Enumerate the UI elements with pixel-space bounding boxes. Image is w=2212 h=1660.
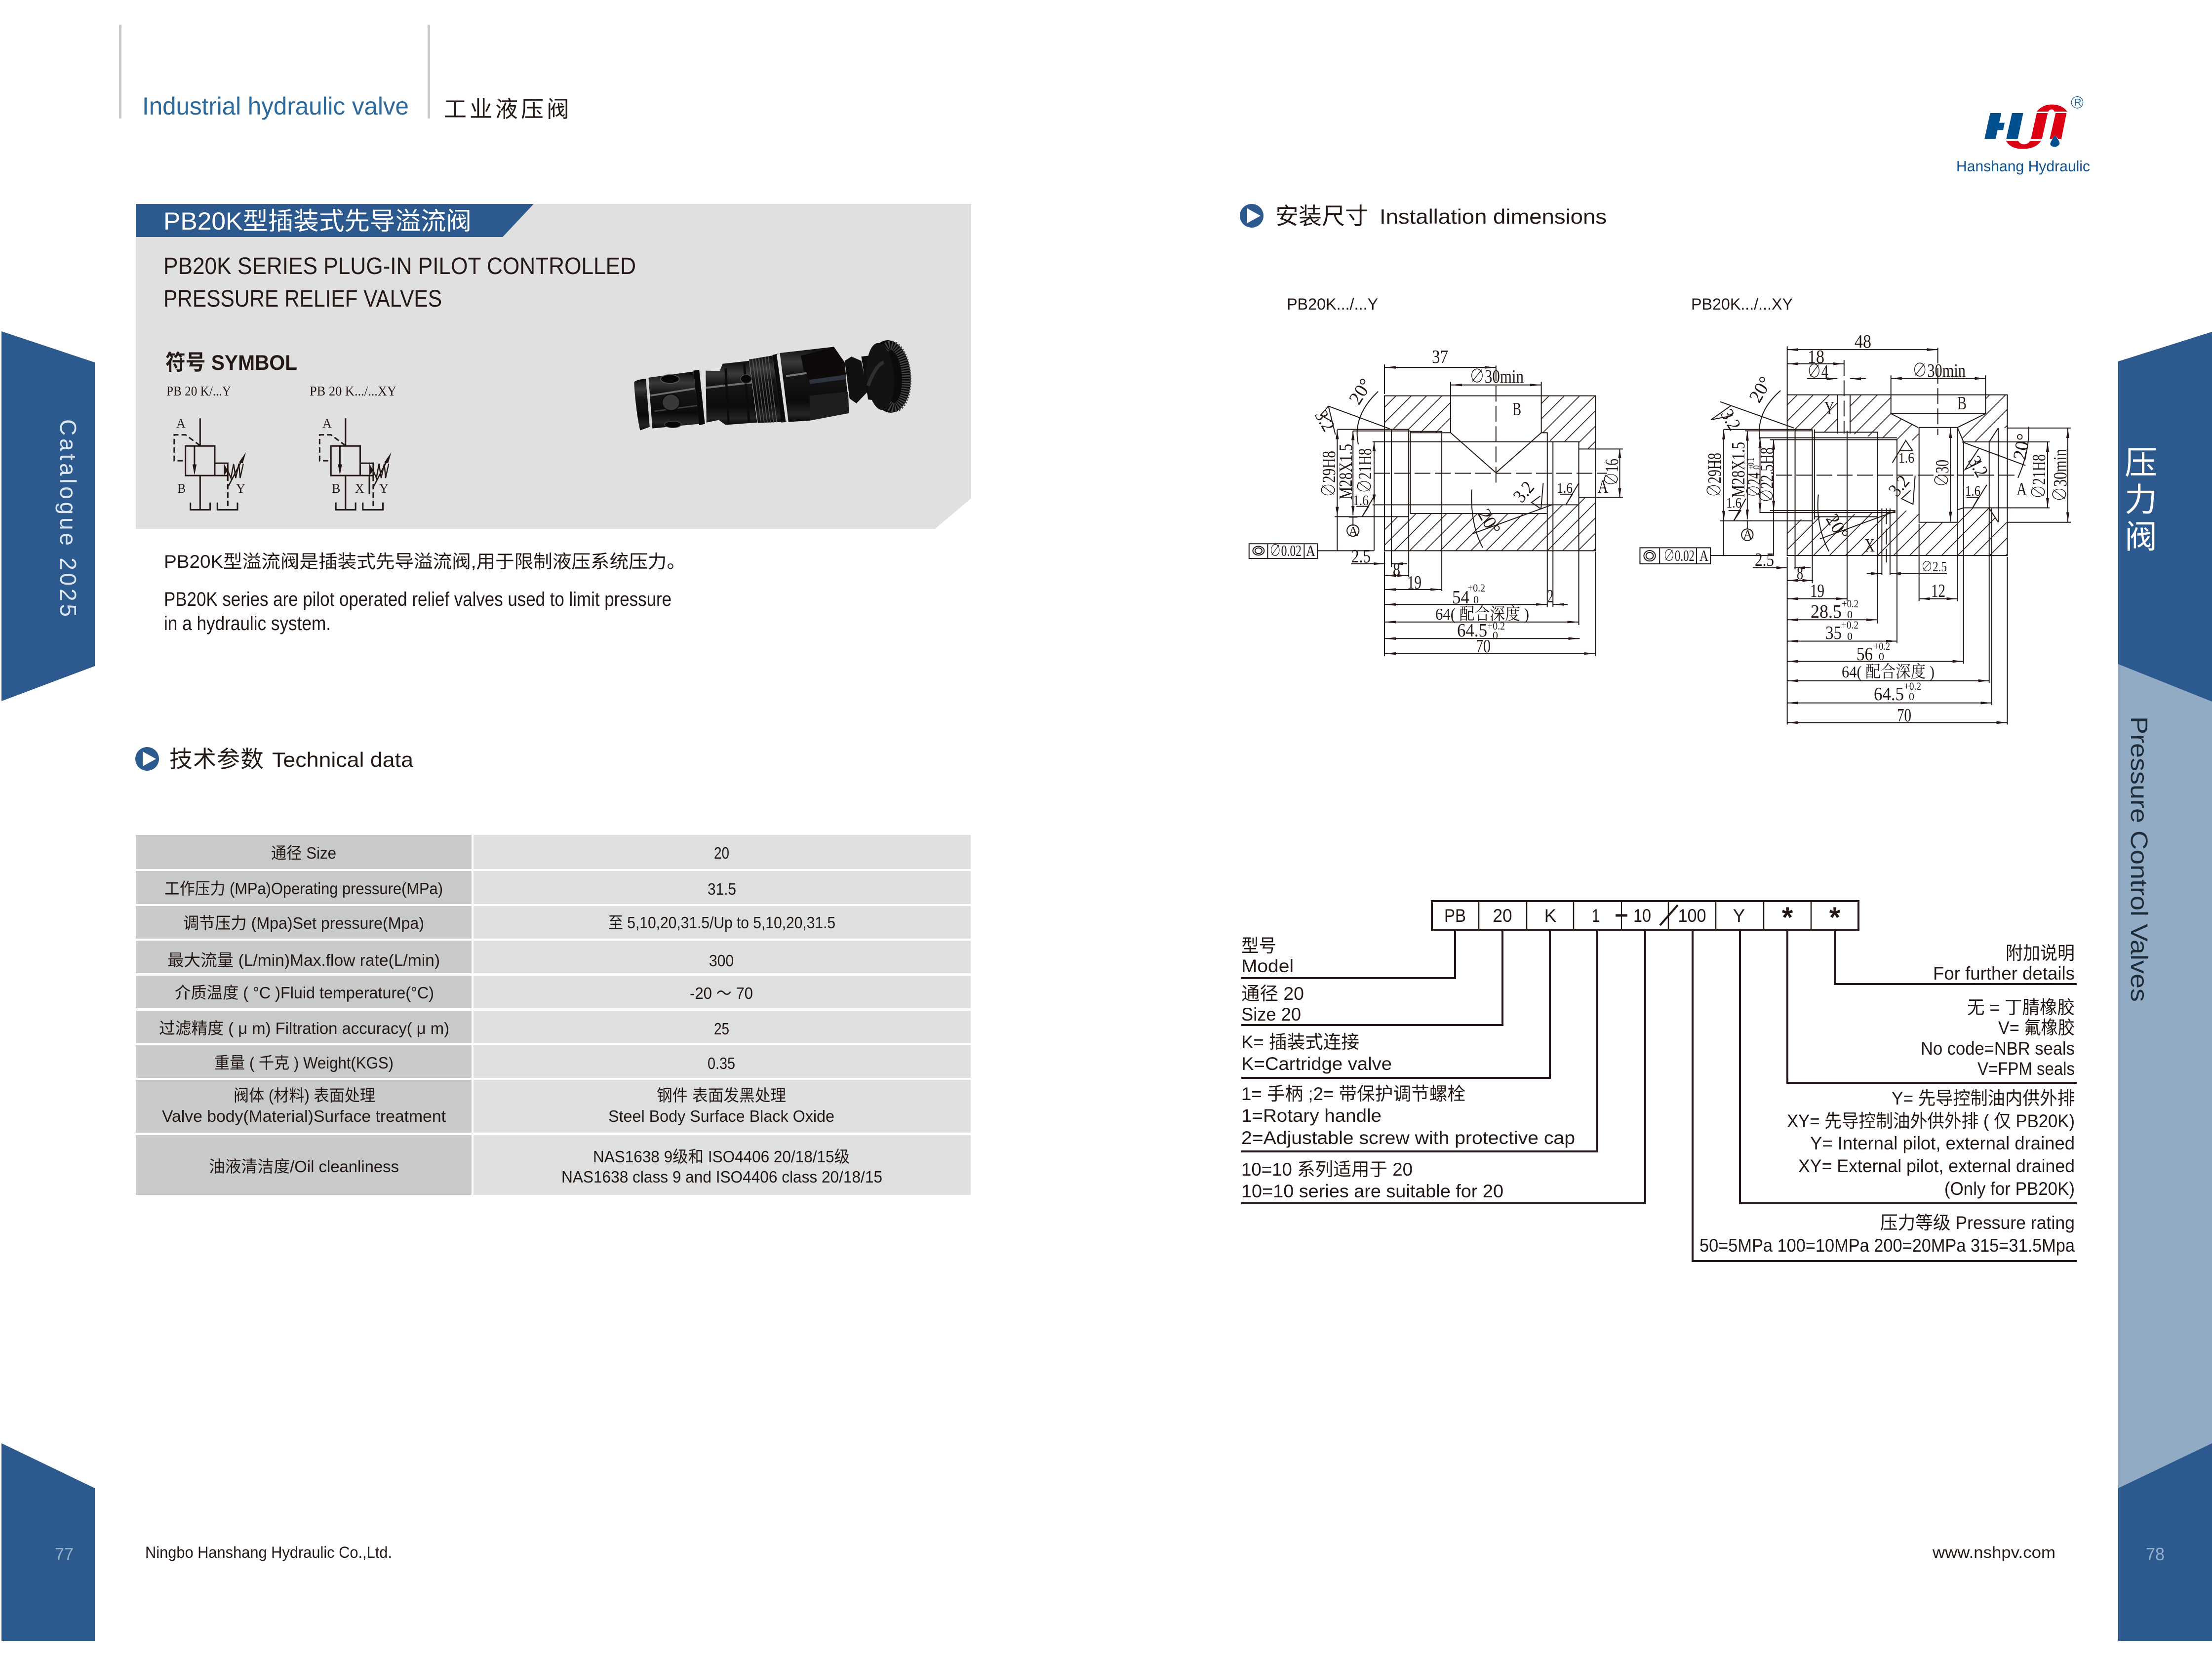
hydraulic symbols: A — [322, 416, 332, 431]
table labels: 调节压力 (Mpa)Set pressure(Mpa) — [183, 914, 424, 932]
drawing Y dimension labels: B — [1512, 399, 1521, 420]
symbol captions — [166, 384, 396, 398]
table labels: 通径 Size — [271, 844, 336, 862]
code boxes: * — [1829, 902, 1841, 934]
code boxes — [1432, 901, 1858, 934]
right legend text: Y= 先导控制油内供外排 — [1892, 1088, 2075, 1108]
drawing XY dimension labels: 20° — [2010, 432, 2034, 462]
drawing XY dimension labels — [1663, 331, 2071, 726]
right legend text: For further details — [1933, 963, 2075, 984]
heading: installation dimensions — [1240, 203, 1607, 229]
drawing XY dimension labels: 20° — [1745, 373, 1776, 406]
right legend text — [1699, 943, 2075, 1256]
code boxes: 10 — [1633, 906, 1651, 926]
drawing XY dimension labels: ∅21H8 — [2029, 454, 2050, 499]
drawing XY dimension labels: A — [1699, 547, 1708, 564]
drawing XY dimension labels: X — [1864, 535, 1875, 556]
drawing Y dimension labels: 19 — [1407, 572, 1422, 593]
drawing Y dimension labels: 64( 配合深度 ) — [1435, 605, 1529, 624]
drawing XY dimension labels: 35 — [1825, 623, 1842, 643]
leader lines — [1241, 930, 2077, 1261]
heading: technical data — [135, 746, 414, 772]
heading: installation dimensions: 安装尺寸 — [1275, 203, 1368, 229]
left tab: catalogue — [1, 331, 95, 701]
heading: technical data: Technical data — [272, 748, 414, 771]
drawing XY dimension labels: +0.2 — [1841, 619, 1858, 631]
code boxes: 100 — [1678, 906, 1706, 926]
hydraulic symbols: X — [355, 481, 364, 496]
right legend text: Y= Internal pilot, external drained — [1810, 1133, 2075, 1153]
drawing XY dimension labels: 3.2 — [1885, 472, 1914, 501]
intro text: in a hydraulic system. — [164, 613, 331, 634]
right legend text: 无 = 丁腈橡胶 — [1967, 997, 2075, 1018]
drawing Y dimension labels: A — [1598, 476, 1608, 497]
table values: Steel Body Surface Black Oxide — [608, 1107, 834, 1125]
drawing XY dimension labels: 1.6 — [1726, 495, 1741, 511]
left legend text — [1241, 936, 1575, 1201]
right legend text: V= 氟橡胶 — [1998, 1018, 2075, 1038]
left legend text: Size 20 — [1241, 1004, 1301, 1025]
page number 78: 78 — [2146, 1544, 2165, 1564]
hydraulic symbols: Y — [379, 481, 389, 496]
drawing Y dimension labels: 1.6 — [1557, 480, 1573, 496]
english title: PB20K SERIES PLUG-IN PILOT CONTROLLED — [163, 253, 636, 279]
code boxes: Y — [1733, 906, 1745, 926]
intro text — [164, 552, 686, 634]
drawing XY dimension labels: 0 — [1847, 630, 1853, 642]
table labels: 重量 ( 千克 ) Weight(KGS) — [214, 1054, 394, 1072]
hydraulic symbols: A — [176, 416, 186, 431]
left legend text: 10=10 系列适用于 20 — [1241, 1159, 1413, 1180]
table labels — [159, 844, 449, 1176]
left legend text: 1= 手柄 ;2= 带保护调节螺栓 — [1241, 1084, 1465, 1104]
table labels: 介质温度 ( °C )Fluid temperature(°C) — [175, 984, 434, 1002]
valve photo — [634, 339, 913, 431]
logo: Hanshang Hydraulic: Hanshang Hydraulic — [1956, 158, 2090, 175]
drawing XY dimension labels: 3.2 — [1716, 406, 1745, 434]
drawing XY dimension labels: B — [1957, 393, 1967, 414]
drawing XY dimension labels: Y — [1824, 398, 1834, 419]
page header: 工业液压阀 — [444, 96, 569, 122]
drawing XY dimension labels: 1.6 — [1965, 483, 1980, 499]
table values: -20 ～ 70 — [690, 984, 753, 1002]
product panel — [136, 204, 971, 529]
drawing XY dimension labels: 3.2 — [1964, 452, 1992, 481]
drawing XY dimension labels: 1.6 — [1898, 450, 1914, 466]
drawing XY dimension labels: ∅30min — [1912, 360, 1966, 381]
right legend text: (Only for PB20K) — [1944, 1179, 2075, 1199]
intro text: PB20K型溢流阀是插装式先导溢流阀,用于限制液压系统压力。 — [164, 552, 686, 572]
footer right: www.nshpv.com — [1932, 1543, 2055, 1561]
model code diagram — [1241, 901, 2077, 1261]
right legend text: 50=5MPa 100=10MPa 200=20MPa 315=31.5Mpa — [1699, 1235, 2075, 1256]
drawing Y dimension labels: 20° — [1473, 506, 1504, 539]
catalogue label: Catalogue 2025 — [55, 419, 81, 617]
code boxes: 20 — [1493, 906, 1512, 926]
logo: Hanshang Hydraulic: R — [2074, 97, 2081, 108]
drawing XY dimension labels: +0.1 — [1746, 458, 1756, 470]
drawing Y dimension labels: 3.2 — [1509, 477, 1539, 507]
drawing Y dimension labels: +0.2 — [1467, 582, 1485, 594]
drawing XY dimension labels: +0.2 — [1842, 597, 1858, 610]
hydraulic symbols — [174, 416, 392, 510]
code boxes: * — [1782, 902, 1793, 934]
vertical english label: Pressure Control Valves — [2126, 716, 2152, 1002]
technical data table — [136, 835, 971, 1195]
code boxes: 1 — [1592, 906, 1600, 926]
drawing Y dimension labels: 70 — [1476, 636, 1491, 657]
symbol Y — [174, 418, 246, 510]
drawing Y dimension labels: 20° — [1345, 375, 1377, 408]
table values: NAS1638 class 9 and ISO4406 class 20/18/15 — [561, 1168, 882, 1186]
drawing XY dimension labels: ∅2.5 — [1921, 559, 1947, 575]
drawing Y dimension labels: 0 — [1493, 629, 1498, 641]
drawing Y dimension labels: 54 — [1452, 587, 1469, 608]
left legend text: Model — [1241, 956, 1294, 976]
table values — [561, 844, 882, 1186]
left legend text: K=Cartridge valve — [1241, 1054, 1392, 1074]
left legend text: 型号 — [1241, 936, 1276, 956]
drawing Y dimension labels: 37 — [1432, 347, 1448, 367]
left legend text: 2=Adjustable screw with protective cap — [1241, 1128, 1575, 1148]
drawing XY dimension labels: 0 — [1879, 650, 1884, 663]
drawing XY dimension labels: +0.2 — [1904, 680, 1921, 692]
table labels: Valve body(Material)Surface treatment — [162, 1107, 446, 1125]
left legend text: 10=10 series are suitable for 20 — [1241, 1181, 1503, 1201]
english title — [163, 253, 636, 312]
title band — [136, 204, 534, 237]
right tab: pressure control valves — [2118, 332, 2212, 1641]
drawing Y dimension labels: +0.2 — [1487, 620, 1505, 632]
vertical chinese label: 阀 — [2125, 518, 2157, 555]
drawing XY dimension labels: 28.5 — [1811, 601, 1842, 622]
drawing XY dimension labels: +0.2 — [1874, 640, 1890, 652]
drawing XY dimension labels: 20° — [1821, 511, 1853, 544]
intro text: PB20K series are pilot operated relief valves used to limit pressure — [164, 589, 672, 610]
hydraulic symbols: B — [177, 481, 186, 496]
drawing XY dimension labels: ∅29H8 — [1704, 453, 1725, 497]
table values: 25 — [714, 1020, 729, 1038]
table labels: 油液清洁度/Oil cleanliness — [209, 1157, 399, 1176]
drawing Y dimension labels: 8 — [1393, 559, 1400, 580]
drawing Y dimension labels: 64.5 — [1457, 620, 1487, 641]
vertical chinese label — [2125, 444, 2157, 555]
drawing Y dimension labels: ∅0.02 — [1269, 542, 1302, 559]
drawing XY dimension labels: A — [1743, 527, 1753, 542]
table labels: 阀体 (材料) 表面处理 — [234, 1086, 375, 1105]
drawing label XY: PB20K.../...XY — [1691, 295, 1793, 313]
table values: 0.35 — [708, 1054, 735, 1072]
drawing label Y: PB20K.../...Y — [1287, 295, 1378, 313]
drawing Y dimension labels: ∅29H8 — [1319, 451, 1340, 497]
page header: Industrial hydraulic valve — [142, 92, 409, 120]
drawing Y dimension labels: 0 — [1473, 593, 1479, 606]
drawing XY dimension labels: 64( 配合深度 ) — [1842, 663, 1935, 681]
title band: PB20K型插装式先导溢流阀 — [163, 207, 472, 235]
heading: installation dimensions: Installation dimensions — [1380, 205, 1607, 228]
code boxes: K — [1544, 906, 1557, 926]
table labels: 最大流量 (L/min)Max.flow rate(L/min) — [167, 951, 440, 969]
drawing XY dimension labels: 2.5 — [1755, 550, 1774, 570]
left legend text: 通径 20 — [1241, 984, 1304, 1004]
table values: NAS1638 9级和 ISO4406 20/18/15级 — [593, 1147, 850, 1166]
symbol XY — [319, 418, 392, 510]
hydraulic symbols: Y — [236, 481, 245, 496]
drawing XY dimension labels: ∅22.5H8 — [1757, 447, 1778, 503]
table values: 31.5 — [708, 880, 736, 898]
drawing XY dimension labels: 70 — [1897, 705, 1911, 726]
drawing Y dimension labels: ∅30min — [1469, 366, 1524, 387]
drawing Y dimension labels: 1.6 — [1353, 492, 1369, 509]
drawing XY dimension labels: M28X1.5 — [1728, 442, 1749, 498]
symbol captions: PB 20 K.../...XY — [310, 384, 396, 398]
drawing XY dimension labels: ∅30min — [2050, 449, 2071, 502]
code boxes: PB — [1444, 906, 1466, 926]
drawing XY dimension labels: ∅24 — [1744, 473, 1765, 497]
drawing Y dimension labels: A — [1306, 542, 1315, 559]
table values: 20 — [714, 844, 729, 862]
right legend text: XY= External pilot, external drained — [1798, 1156, 2075, 1176]
right legend text: 附加说明 — [2006, 943, 2075, 963]
drawing XY dimension labels: ∅0.02 — [1663, 547, 1695, 564]
vertical chinese label: 压 — [2125, 444, 2157, 481]
drawing Y dimension labels: ∅16 — [1602, 459, 1622, 486]
drawing Y dimension labels: M28X1.5 — [1336, 444, 1356, 500]
table labels: 工作压力 (MPa)Operating pressure(MPa) — [164, 879, 443, 898]
drawing XY dimension labels: 64.5 — [1874, 684, 1904, 705]
english title: PRESSURE RELIEF VALVES — [163, 286, 442, 312]
symbol heading: 符号 SYMBOL — [165, 351, 297, 375]
drawing XY dimension labels: 8 — [1797, 563, 1803, 584]
table values: 钢件 表面发黑处理 — [657, 1086, 786, 1105]
drawing XY dimension labels: 12 — [1931, 581, 1945, 601]
table values: 300 — [709, 951, 734, 970]
drawing Y dimension labels — [1269, 347, 1622, 657]
drawing XY dimension labels: A — [2016, 479, 2027, 500]
right legend text: 压力等级 Pressure rating — [1880, 1213, 2075, 1233]
drawing XY dimension labels: 18 — [1808, 347, 1824, 367]
left legend text: 1=Rotary handle — [1241, 1106, 1382, 1126]
table labels: 过滤精度 ( μ m) Filtration accuracy( μ m) — [159, 1019, 449, 1037]
drawing Y dimension labels: A — [1348, 524, 1358, 539]
installation drawing Y — [1249, 347, 1623, 657]
symbol captions: PB 20 K/...Y — [166, 384, 231, 398]
drawing Y dimension labels: 2.5 — [1351, 546, 1371, 567]
installation drawing XY — [1640, 331, 2071, 726]
drawing XY dimension labels: 19 — [1810, 581, 1824, 601]
left legend text: K= 插装式连接 — [1241, 1032, 1359, 1052]
drawing XY dimension labels: 0 — [1751, 465, 1761, 470]
drawing XY dimension labels: ∅4 — [1807, 361, 1828, 382]
drawing XY dimension labels: 0 — [1847, 608, 1853, 621]
drawing Y dimension labels: 3.2 — [1310, 407, 1339, 435]
page number 77: 77 — [55, 1544, 74, 1564]
drawing XY dimension labels: 48 — [1855, 331, 1871, 352]
right legend text: V=FPM seals — [1977, 1059, 2075, 1079]
drawing Y dimension labels: ∅21H8 — [1355, 448, 1376, 493]
heading: technical data: 技术参数 — [169, 746, 264, 772]
drawing XY dimension labels: 0 — [1909, 690, 1914, 703]
drawing Y dimension labels: 2 — [1547, 586, 1553, 607]
left tab: page number — [1, 1443, 95, 1641]
right legend text: No code=NBR seals — [1921, 1038, 2075, 1059]
vertical chinese label: 力 — [2125, 481, 2157, 518]
drawing XY dimension labels: 56 — [1856, 644, 1873, 665]
hydraulic symbols: B — [332, 481, 340, 496]
footer left: Ningbo Hanshang Hydraulic Co.,Ltd. — [145, 1543, 392, 1561]
page header — [119, 25, 569, 122]
drawing XY dimension labels: ∅30 — [1932, 460, 1953, 487]
table values: 至 5,10,20,31.5/Up to 5,10,20,31.5 — [608, 913, 835, 932]
right legend text: XY= 先导控制油外供外排 ( 仅 PB20K) — [1787, 1111, 2075, 1131]
logo: Hanshang Hydraulic — [1956, 97, 2090, 175]
